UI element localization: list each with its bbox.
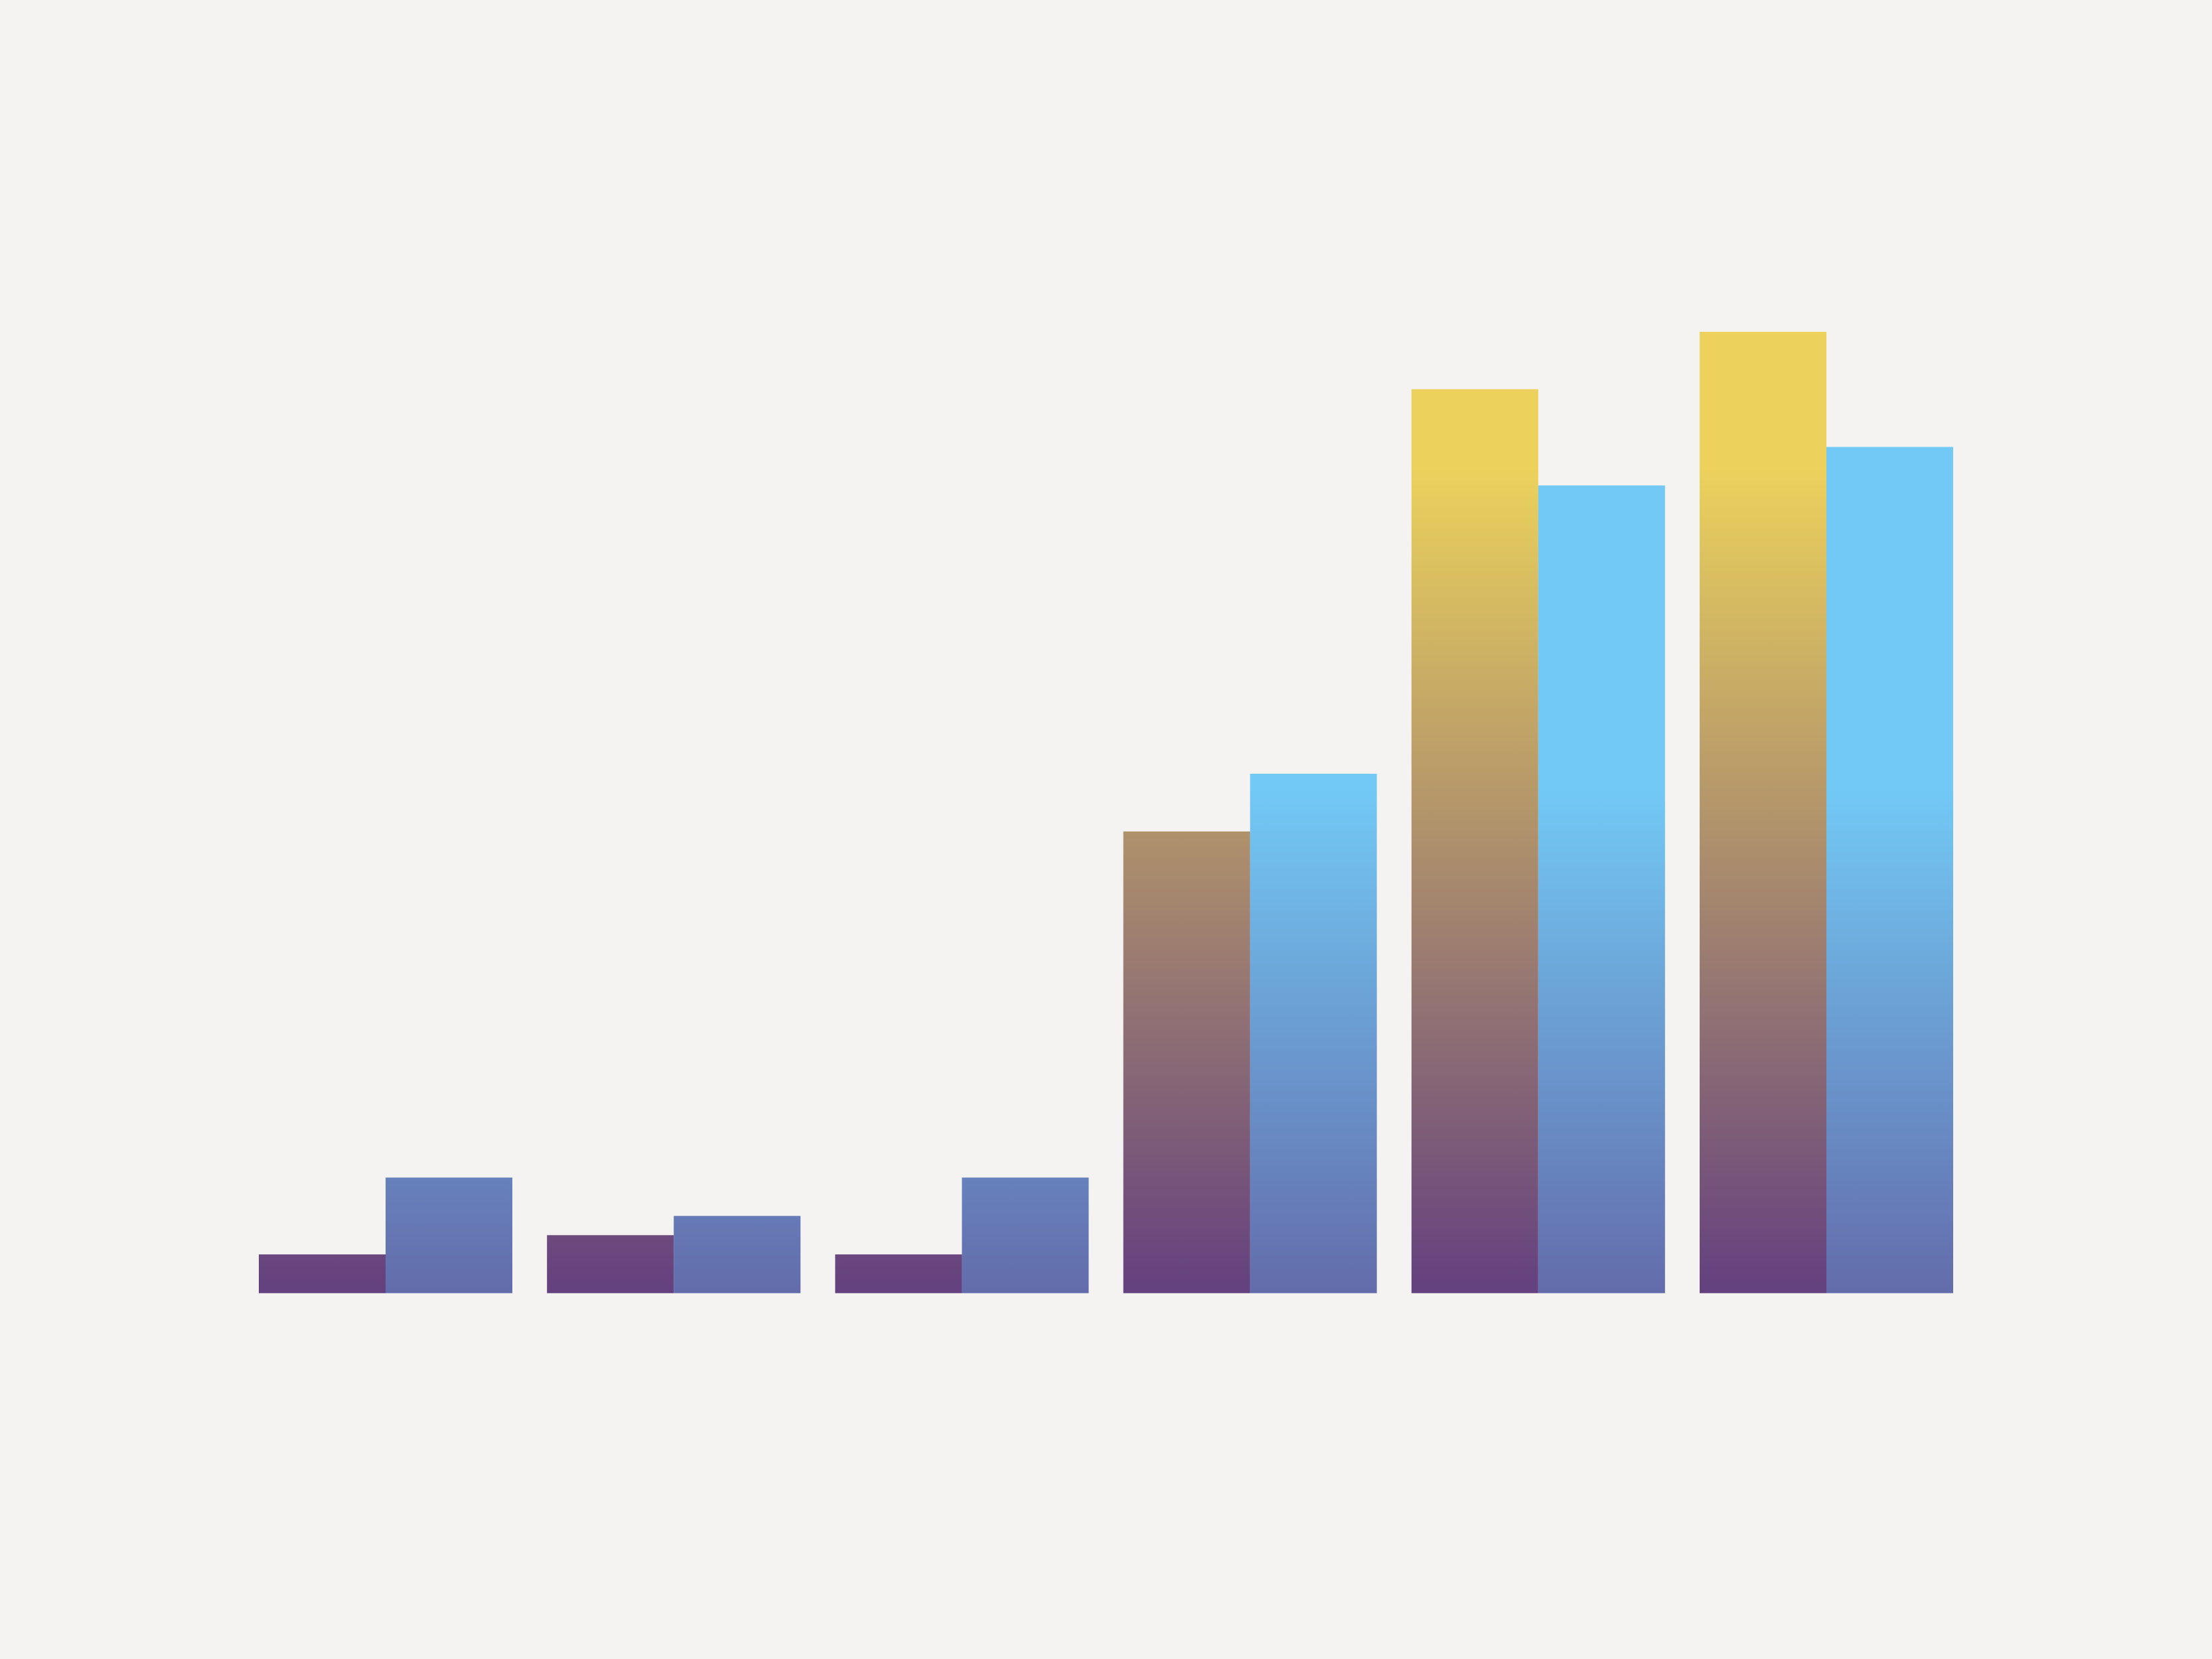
bar group 2 (547, 1216, 800, 1293)
bar group 1 (259, 1177, 512, 1293)
bar group 5 (1412, 389, 1665, 1293)
bar group 6 (1700, 332, 1953, 1293)
bar group 4 (1124, 774, 1377, 1293)
bar group 3 (835, 1177, 1088, 1293)
